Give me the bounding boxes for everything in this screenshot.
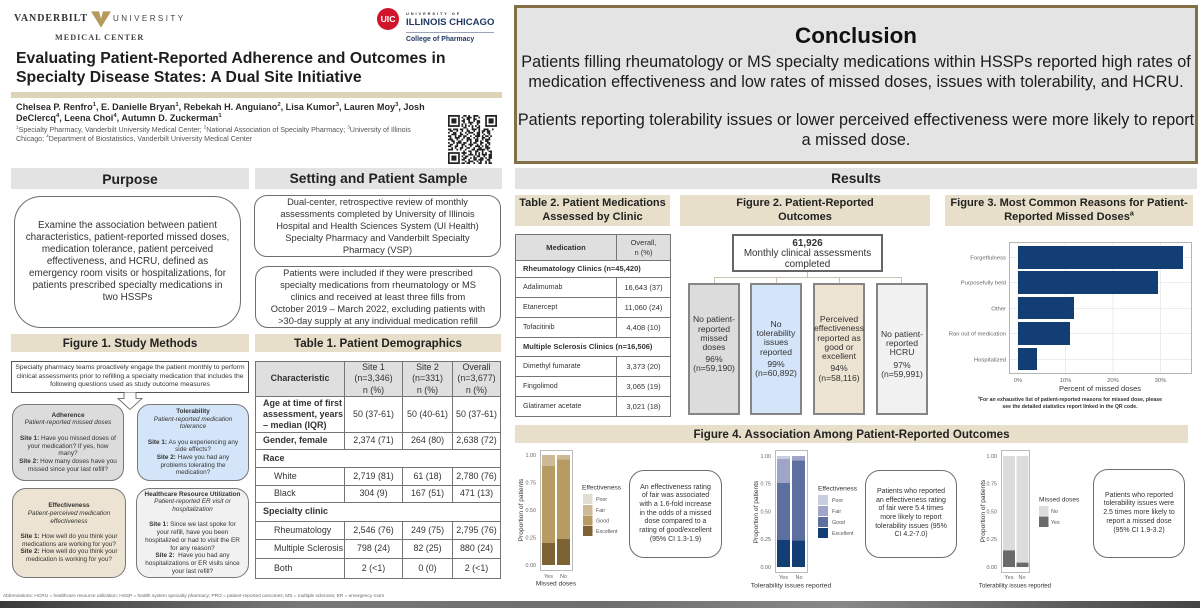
table: patient medications by clinic: 3,065 (19) xyxy=(626,382,661,391)
chart: missed doses by tolerability issues: No xyxy=(1051,509,1058,515)
title: Specialty Disease States: A Dual Site Initiative xyxy=(16,69,362,86)
callout: effectiveness and tolerability: more likely to report xyxy=(880,514,942,521)
heading: Figure 1 xyxy=(11,334,249,352)
panel: adherence xyxy=(12,404,124,481)
bar chart: reasons for missed doses: 30% xyxy=(1155,378,1167,384)
table: patient demographics: Age at time of first xyxy=(263,398,342,408)
callout: tolerability and missed dose: (95% CI 1.9-3.2) xyxy=(1113,527,1165,534)
panel: adherence: Site 1: Have you missed doses of xyxy=(20,435,116,442)
icon: QR code xyxy=(448,115,497,164)
table: patient demographics: Rheumatology xyxy=(274,525,331,535)
panel: healthcare resource utilization: your last refill? xyxy=(172,568,213,575)
heading: Figure 4 xyxy=(515,425,1188,443)
panel: tolerability: Site 1: As you experiencing any xyxy=(148,439,238,446)
table: patient demographics: White xyxy=(274,471,297,481)
panel: inclusion criteria: >30-day supply at any individual medication refill xyxy=(278,316,478,326)
table: patient demographics: assessment, years xyxy=(263,409,343,419)
chart: effectiveness by missed doses: 1.00 xyxy=(526,453,536,459)
panel: effectiveness: Patient-perceived medication xyxy=(28,510,110,517)
panel: setting description: Dual-center, retrospective review of monthly xyxy=(287,196,468,206)
table: patient medications by clinic: Dimethyl fumarate xyxy=(523,362,581,370)
panel: effectiveness: Effectiveness xyxy=(48,502,90,509)
callout: effectiveness and missed dose: (95% CI 1.3-1.9) xyxy=(650,536,701,543)
outcome box: HCRU: reported xyxy=(886,338,918,348)
table: patient medications by clinic: Medication xyxy=(546,243,586,252)
table: patient demographics: Gender, female xyxy=(263,435,328,445)
table: patient demographics: 471 (13) xyxy=(460,488,493,498)
affiliations xyxy=(16,125,411,143)
table: patient medications by clinic: Multiple Sclerosis Clinics (n=16,506) xyxy=(523,342,652,351)
flow chart: total assessments box xyxy=(732,234,883,272)
chart: effectiveness by tolerability issues: Fair xyxy=(832,509,841,515)
table: patient demographics: Overall xyxy=(462,362,491,372)
chart: effectiveness by tolerability issues: Proportion of patients xyxy=(753,480,760,543)
chart: effectiveness by missed doses: No xyxy=(560,574,567,580)
table: patient medications by clinic: Adalimumab xyxy=(523,283,562,291)
chart: effectiveness by tolerability issues: 1.00 xyxy=(760,454,771,460)
table: patient demographics: 0 (0) xyxy=(418,563,437,573)
panel: tolerability: problems tolerating the xyxy=(160,462,226,469)
callout: effectiveness and tolerability xyxy=(865,470,957,558)
chart: effectiveness by tolerability issues: 0.50 xyxy=(760,510,771,516)
chart: effectiveness by missed doses: Excellent xyxy=(596,529,618,535)
panel: healthcare resource utilization xyxy=(136,488,249,578)
panel: tolerability: tolerance xyxy=(180,423,206,430)
heading: Table 2 xyxy=(515,195,670,226)
outcome box: missed doses: doses 96% xyxy=(703,342,725,364)
outcome box: effectiveness: good or xyxy=(824,342,854,352)
panel: setting description: Pharmacy (VSP) xyxy=(343,245,412,255)
panel: tolerability xyxy=(137,404,249,481)
table: patient medications by clinic: 16,643 (37) xyxy=(624,283,663,292)
table: patient medications by clinic: Glatiramer acetate xyxy=(523,402,581,410)
table: patient medications by clinic: 3,021 (18) xyxy=(626,402,661,411)
heading: Figure 1: Figure 1. Study Methods xyxy=(63,336,197,350)
chart: missed doses by tolerability issues: No xyxy=(1018,575,1026,581)
table: patient demographics: 2,546 (76) xyxy=(353,525,394,535)
callout: effectiveness and missed dose: An effectiveness rating xyxy=(640,484,711,491)
callout: effectiveness and missed dose: in the odds of a missed xyxy=(639,510,711,517)
panel: purpose text: two HSSPs xyxy=(103,292,152,303)
panel: setting description: assessments completed by University of Illinois xyxy=(280,209,475,219)
callout: effectiveness and missed dose: with a 1.6-fold increase xyxy=(640,501,711,508)
callout: effectiveness and missed dose: of fair was associated xyxy=(642,492,709,499)
callout: tolerability and missed dose: report a missed dose xyxy=(1106,518,1172,525)
heading: Setting and Patient Sample: Setting and Patient Sample xyxy=(290,171,467,186)
panel: study methods intro: following questions used as study outcome measures xyxy=(50,381,210,388)
table: patient demographics: 2,719 (81) xyxy=(353,471,394,481)
chart: effectiveness by missed doses: Missed doses xyxy=(536,580,577,588)
panel: effectiveness: effectiveness xyxy=(50,518,88,525)
table: patient medications by clinic xyxy=(515,234,671,417)
table: patient demographics: 2,795 (76) xyxy=(456,525,497,535)
heading: Purpose xyxy=(11,168,249,189)
panel: inclusion criteria: specialty medications from rheumatology or MS xyxy=(280,280,476,290)
panel: effectiveness: Site 1: How well do you think your xyxy=(20,533,117,540)
panel: purpose text xyxy=(14,196,241,328)
panel: adherence: Adherence xyxy=(51,412,84,419)
chart: missed doses by tolerability issues: 1.00 xyxy=(986,454,997,460)
outcome box: tolerability: No xyxy=(770,319,782,329)
authors: DeClercq4, Leena Choi4, Autumn D. Zuckerman1 xyxy=(16,113,222,123)
table: patient demographics: 50 (40-61) xyxy=(407,409,448,419)
chart: missed doses by tolerability issues: Proportion of patients xyxy=(980,479,987,542)
authors: Chelsea P. Renfro1, E. Danielle Bryan1, Rebekah H. Anguiano2, Lisa Kumor3, Lauren Moy3, Josh xyxy=(16,102,425,112)
table: patient demographics: – median (IQR) xyxy=(263,420,327,430)
panel: study methods intro: Specialty pharmacy teams proactively engage the patient monthly to perform xyxy=(15,364,245,371)
outcome box: effectiveness: reported as xyxy=(817,333,861,343)
flow chart: total assessments box: completed xyxy=(785,259,830,270)
bar chart: reasons for missed doses: Purposefully held xyxy=(961,280,1006,286)
heading: Figure 4: Figure 4. Association Among Patient-Reported Outcomes xyxy=(693,428,1010,440)
panel: effectiveness: medication is working for you? xyxy=(26,556,112,563)
table: patient demographics xyxy=(255,361,501,579)
logo: Vanderbilt University Medical Center xyxy=(14,11,186,42)
title xyxy=(16,50,446,86)
bar chart: reasons for missed doses: Percent of missed doses xyxy=(1059,384,1141,393)
callout: effectiveness and missed dose: dose compared to a xyxy=(645,518,706,525)
panel: effectiveness: Site 2: How well do you think your xyxy=(20,548,117,555)
outcome box: HCRU: No patient- xyxy=(881,329,923,339)
panel: inclusion criteria: October 2019 – March 2022, excluding patients with xyxy=(271,304,485,314)
heading: Table 2: Assessed by Clinic xyxy=(542,210,643,222)
chart: missed doses by tolerability issues: Yes xyxy=(1051,520,1060,526)
chart: effectiveness by missed doses: Fair xyxy=(596,508,605,514)
logo: Vanderbilt University Medical Center: VANDERBILT xyxy=(14,13,88,24)
table: patient demographics: 880 (24) xyxy=(460,543,493,553)
footnote: figure 3: see the detailed statistics report linked in the QR code. xyxy=(1002,404,1138,410)
chart: effectiveness by missed doses: Effectiveness xyxy=(582,484,622,492)
conclusion text: medication effectiveness and low rates of missed doses, issues with tolerability, and HCRU. Patients reporting tolerability issues or lower perceived effectiveness were more likely to report xyxy=(518,73,1194,129)
chart: missed doses by tolerability issues: Tolerability issues reported xyxy=(979,582,1051,590)
outcome box: tolerability: tolerability xyxy=(757,328,795,338)
heading: Figure 3 xyxy=(945,195,1193,226)
panel: setting description: Specialty Pharmacy and Vanderbilt Specialty xyxy=(285,233,470,243)
conclusion heading: Conclusion xyxy=(795,23,917,48)
heading: Figure 3: Figure 3. Most Common Reasons for Patient- xyxy=(950,197,1188,209)
chart: effectiveness by tolerability issues: 0.00 xyxy=(760,565,771,571)
chart: missed doses by tolerability issues: Yes xyxy=(1005,575,1014,581)
panel: setting description xyxy=(254,195,501,257)
panel: healthcare resource utilization: Healthcare Resource Utilization xyxy=(145,491,240,498)
chart: effectiveness by tolerability issues: Yes xyxy=(779,575,788,581)
chart: effectiveness by missed doses: Poor xyxy=(596,497,607,503)
panel: adherence: Site 2: How many doses have you xyxy=(19,458,117,465)
panel: adherence: your medication? If yes, how xyxy=(27,442,108,450)
footnote: figure 3 xyxy=(978,395,1162,410)
heading: Setting and Patient Sample xyxy=(255,168,502,189)
outcome box: effectiveness: excellent 94% xyxy=(822,351,856,373)
chart: effectiveness by tolerability issues: Effectiveness xyxy=(818,486,858,492)
table: patient demographics: n (%) xyxy=(363,385,384,395)
chart: effectiveness by missed doses: 0.00 xyxy=(526,563,536,569)
table: patient demographics: (n=3,677) xyxy=(457,373,496,383)
panel: purpose text: patients prescribed specialty medications in xyxy=(33,280,222,291)
outcome box: missed doses: (n=59,190) xyxy=(693,363,735,373)
chart: effectiveness by tolerability issues: No xyxy=(795,575,803,581)
chart: effectiveness by missed doses: Yes xyxy=(544,574,553,580)
panel: study methods intro: clinical assessments prior to refilling a specialty medication that includes the xyxy=(16,373,243,380)
chart: effectiveness by tolerability issues: Tolerability issues reported xyxy=(751,582,831,590)
chart: effectiveness by missed doses: 0.50 xyxy=(526,508,536,514)
table: patient demographics: Race xyxy=(263,453,285,463)
table: patient demographics: 304 (9) xyxy=(359,488,388,498)
outcome box: missed doses xyxy=(688,283,740,415)
table: patient demographics: 249 (75) xyxy=(411,525,444,535)
logo: Vanderbilt University Medical Center: UNIVERSITY xyxy=(113,14,186,23)
outcome box: effectiveness: (n=58,116) xyxy=(818,372,860,382)
panel: effectiveness: medications are working for you? xyxy=(22,541,116,548)
table: patient demographics: 2,374 (71) xyxy=(353,435,394,445)
outcome box: missed doses: No patient- xyxy=(693,314,735,324)
table: patient demographics: 2,638 (72) xyxy=(456,435,497,445)
table: patient demographics: 50 (37-61) xyxy=(353,409,394,419)
panel: healthcare resource utilization: Site 1: Since we last spoke for xyxy=(149,521,236,528)
table: patient demographics: 167 (51) xyxy=(411,488,444,498)
panel: inclusion criteria: Patients were included if they were prescribed xyxy=(283,268,473,278)
flow chart: total assessments box: 61,926 xyxy=(792,238,823,249)
panel: tolerability: Tolerability xyxy=(176,408,210,415)
chart: missed doses by tolerability issues: 0.00 xyxy=(986,565,997,571)
chart: effectiveness by tolerability issues: Good xyxy=(832,520,845,526)
outcome box: tolerability xyxy=(750,283,802,415)
callout: effectiveness and missed dose xyxy=(629,470,722,558)
table: patient demographics: Multiple Sclerosis xyxy=(274,543,343,553)
bar chart: reasons for missed doses: 0% xyxy=(1014,378,1023,384)
logo: University of Illinois Chicago College of Pharmacy: College of Pharmacy xyxy=(406,36,474,43)
panel: effectiveness xyxy=(12,488,126,578)
heading: Figure 2: Figure 2. Patient-Reported xyxy=(736,197,874,209)
outcome box: HCRU xyxy=(876,283,928,415)
chart: effectiveness by tolerability issues: Excellent xyxy=(832,531,854,537)
table: patient demographics: n (%) xyxy=(417,385,438,395)
table: patient demographics: 2 (<1) xyxy=(362,563,385,573)
table: patient medications by clinic: n (%) xyxy=(635,248,652,256)
panel: study methods intro xyxy=(11,361,249,393)
panel: adherence: missed since your last refill? xyxy=(28,466,108,473)
heading: Table 1 xyxy=(255,334,501,352)
callout: effectiveness and tolerability: tolerability issues (95% xyxy=(875,523,947,530)
logo: University of Illinois Chicago College of Pharmacy xyxy=(377,8,494,43)
heading: Figure 2 xyxy=(680,195,930,226)
outcome box: missed doses: missed xyxy=(700,333,728,343)
callout: tolerability and missed dose: tolerability issues were xyxy=(1104,500,1174,507)
outcome box: effectiveness: effectiveness xyxy=(814,323,864,333)
panel: healthcare resource utilization: hospitalized or had to visit the ER xyxy=(145,537,240,544)
panel: purpose text: medication tolerance, patient perceived xyxy=(42,244,213,255)
outcome box: tolerability: issues xyxy=(764,337,788,347)
chart: effectiveness by tolerability issues: Poor xyxy=(832,498,843,504)
panel: healthcare resource utilization: for any reason? xyxy=(170,545,215,552)
abbreviations footnote: Abbreviations: HCRU = healthcare resource utilization; HSSP = health system specialty pharmacy; PRO = patient-reported outcomes; MS = multiple sclerosis; ER = emergency room xyxy=(3,594,384,599)
heading: Table 2: Table 2. Patient Medications xyxy=(519,197,666,209)
panel: healthcare resource utilization: hospitalization xyxy=(172,506,213,513)
panel: healthcare resource utilization: Site 2: Have you had any xyxy=(155,552,230,559)
panel: healthcare resource utilization: Patient-reported ER visit or xyxy=(154,498,231,505)
conclusion text: a missed dose. xyxy=(802,131,910,149)
chart: missed doses by tolerability issues: 0.75 xyxy=(986,482,997,488)
table: patient demographics: Site 2 xyxy=(416,362,439,372)
table: patient demographics: (n=331) xyxy=(412,373,443,383)
bar chart: reasons for missed doses: Ran out of medication xyxy=(949,332,1006,338)
table: patient demographics: 61 (18) xyxy=(413,471,442,481)
table: patient demographics: (n=3,346) xyxy=(354,373,393,383)
affiliations: Chicago; 4Department of Biostatistics, Vanderbilt University Medical Center xyxy=(16,133,252,143)
bar chart: reasons for missed doses: Other xyxy=(991,306,1006,312)
logo: University of Illinois Chicago College of Pharmacy: UNIVERSITY OF xyxy=(406,11,461,16)
footnote: figure 3: aFor an exhaustive list of patient-reported reasons for missed dose, please xyxy=(978,395,1162,403)
callout: tolerability and missed dose: Patients who reported xyxy=(1105,492,1173,499)
table: patient demographics: Characteristic xyxy=(271,373,329,383)
outcome box: tolerability: (n=60,892) xyxy=(755,368,797,378)
table: patient medications by clinic: Etanercept xyxy=(523,303,557,311)
heading: Purpose: Purpose xyxy=(102,170,158,186)
heading: Results xyxy=(515,168,1197,189)
chart: effectiveness by missed doses xyxy=(518,450,622,588)
chart: effectiveness by tolerability issues xyxy=(750,450,858,590)
outcome box: effectiveness xyxy=(813,283,865,415)
bar chart: reasons for missed doses: Forgetfulness xyxy=(970,256,1006,262)
table: patient demographics: 2,780 (76) xyxy=(456,471,497,481)
table: patient demographics: 798 (24) xyxy=(357,543,390,553)
panel: tolerability: Site 2: Have you had any xyxy=(157,454,229,461)
chart: effectiveness by missed doses: 0.25 xyxy=(526,536,536,542)
panel: inclusion criteria: clinics and received at least three fills from xyxy=(291,292,465,302)
chart: missed doses by tolerability issues xyxy=(979,450,1080,590)
arrow: down to question boxes xyxy=(117,392,143,410)
panel: conclusion xyxy=(514,5,1198,164)
logo: Vanderbilt University Medical Center: MEDICAL CENTER xyxy=(55,33,144,42)
conclusion text: Patients filling rheumatology or MS specialty medications within HSSPs reported high rates of xyxy=(521,53,1191,71)
chart: missed doses by tolerability issues: Missed doses xyxy=(1039,496,1080,504)
callout: effectiveness and tolerability: an effectiveness rating xyxy=(876,497,946,504)
panel: adherence: many? xyxy=(58,450,78,457)
table: patient demographics: 264 (80) xyxy=(411,435,444,445)
table: patient demographics: Both xyxy=(274,563,292,573)
logo: University of Illinois Chicago College of Pharmacy: ILLINOIS CHICAGO xyxy=(406,17,494,28)
panel: setting description: Hospital and Health Sciences System (UI Health) xyxy=(276,221,479,231)
panel: purpose text: effectiveness, and HCRU, defined as xyxy=(47,256,208,267)
table: patient demographics: 82 (25) xyxy=(413,543,442,553)
outcome box: missed doses: reported xyxy=(698,324,730,334)
table: patient demographics: Site 1 xyxy=(362,362,385,372)
callout: tolerability and missed dose: 2.5 times more likely to xyxy=(1103,509,1175,516)
bar chart: reasons for missed doses: 10% xyxy=(1060,378,1072,384)
panel: purpose text: emergency room visits or hospitalizations, for xyxy=(29,268,226,279)
bar chart: reasons for missed doses: 20% xyxy=(1107,378,1120,384)
table: patient medications by clinic: Fingolimod xyxy=(523,382,558,390)
panel: purpose text: characteristics, patient-reported missed doses, xyxy=(26,232,229,243)
table: patient demographics: 2 (<1) xyxy=(465,563,488,573)
outcome box: HCRU: (n=59,991) xyxy=(881,369,923,379)
panel: healthcare resource utilization: your refill, have you been xyxy=(157,529,228,536)
outcome box: tolerability: reported 99% xyxy=(760,346,792,369)
table: patient medications by clinic: 11,060 (24) xyxy=(625,303,662,312)
authors xyxy=(16,102,425,123)
table: patient demographics: 50 (37-61) xyxy=(456,409,497,419)
heading: Table 1: Table 1. Patient Demographics xyxy=(294,336,462,350)
chart: missed doses by tolerability issues: 0.50 xyxy=(986,510,997,516)
table: patient medications by clinic: Rheumatology Clinics (n=45,420) xyxy=(523,264,641,273)
bar chart: reasons for missed doses xyxy=(949,242,1192,393)
panel: healthcare resource utilization: hospitalizations or ER visits since xyxy=(145,560,240,567)
outcome box: HCRU: HCRU 97% xyxy=(890,347,914,370)
panel: purpose text: Examine the association between patient xyxy=(38,220,217,231)
title: Evaluating Patient-Reported Adherence and Outcomes in xyxy=(16,50,446,67)
table: patient demographics: Specialty clinic xyxy=(263,506,328,516)
callout: effectiveness and tolerability: of fair were 5.4 times xyxy=(879,505,943,512)
table: patient medications by clinic: Overall, xyxy=(631,238,656,247)
conclusion text xyxy=(518,53,1194,149)
table: patient demographics: n (%) xyxy=(466,385,487,395)
chart: effectiveness by tolerability issues: 0.25 xyxy=(760,537,771,543)
panel: adherence: Patient-reported missed doses xyxy=(25,419,111,426)
callout: effectiveness and tolerability: Patients who reported xyxy=(877,488,945,495)
callout: tolerability and missed dose xyxy=(1093,469,1185,558)
heading: Figure 3: Reported Missed Dosesa xyxy=(1004,208,1134,222)
affiliations: 1Specialty Pharmacy, Vanderbilt University Medical Center; 2National Association of Specialty Pharmacy; 3University of Illinois xyxy=(16,125,411,134)
heading: Figure 2: Outcomes xyxy=(778,210,832,222)
panel: tolerability: side effects? xyxy=(175,446,211,453)
panel: tolerability: Patient-reported medication xyxy=(154,416,232,423)
chart: effectiveness by missed doses: 0.75 xyxy=(526,480,536,486)
bar chart: reasons for missed doses: Hospitalized xyxy=(974,358,1006,364)
outcome box: effectiveness: Perceived xyxy=(820,314,858,324)
chart: effectiveness by missed doses: Proportion of patients xyxy=(518,478,525,541)
heading: Results: Results xyxy=(831,171,881,186)
table: patient demographics: Black xyxy=(274,488,296,498)
flow chart: total assessments box: Monthly clinical assessments xyxy=(744,248,871,259)
chart: effectiveness by missed doses: Good xyxy=(596,518,609,524)
panel: inclusion criteria xyxy=(255,266,501,328)
logo: University of Illinois Chicago College of Pharmacy: UIC xyxy=(381,14,395,24)
callout: effectiveness and missed dose: rating of good/excellent xyxy=(639,527,712,534)
table: patient medications by clinic: 4,408 (10) xyxy=(626,323,661,332)
callout: effectiveness and tolerability: CI 4.2-7.0) xyxy=(894,531,928,538)
chart: missed doses by tolerability issues: 0.25 xyxy=(986,537,997,543)
chart: effectiveness by tolerability issues: 0.75 xyxy=(760,482,771,488)
table: patient medications by clinic: 3,373 (20) xyxy=(626,362,661,371)
panel: tolerability: medication? xyxy=(176,469,210,476)
table: patient medications by clinic: Tofacitinib xyxy=(523,323,555,331)
